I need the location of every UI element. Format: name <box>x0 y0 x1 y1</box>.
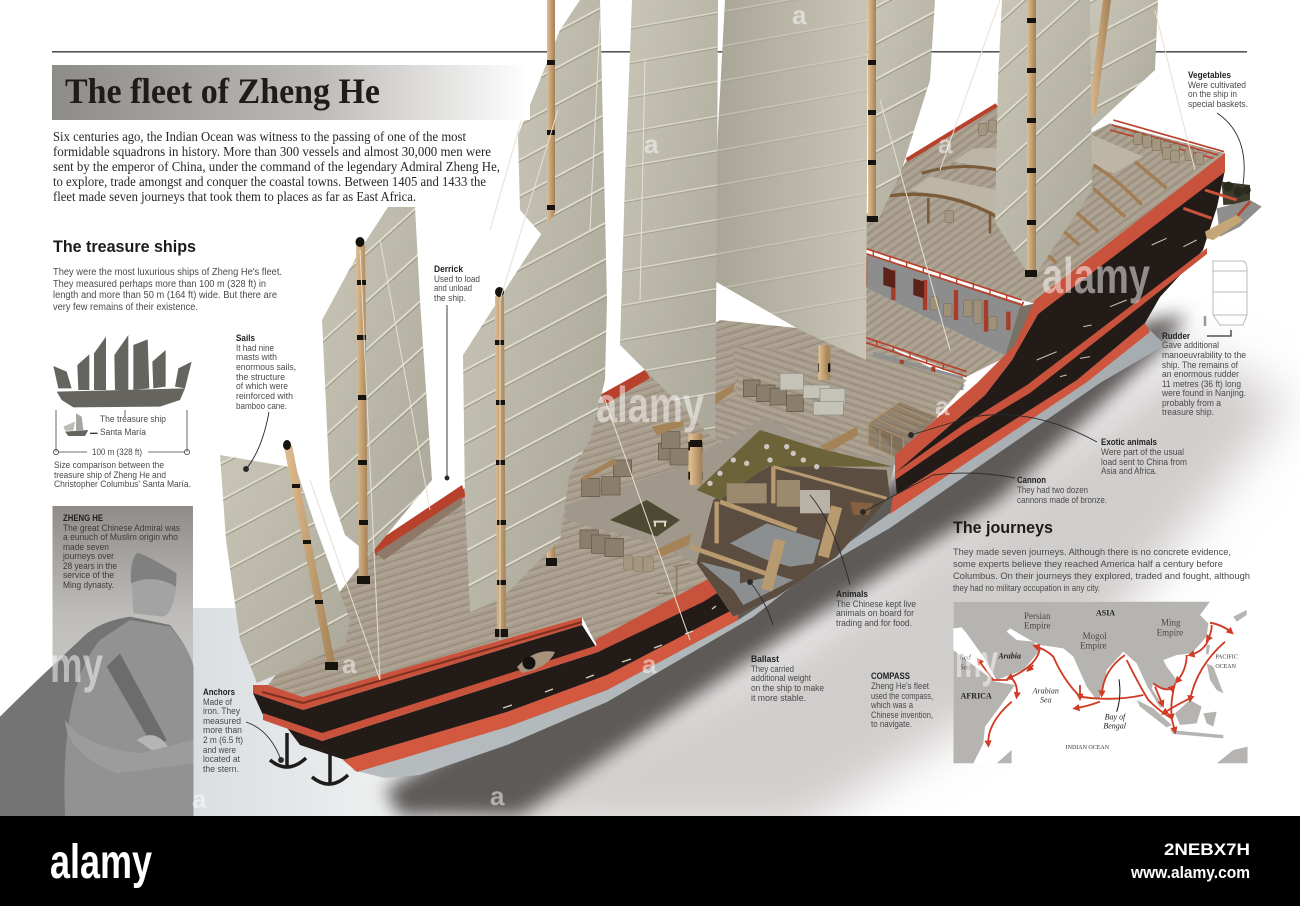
label: compass: to navigate. <box>871 719 912 729</box>
mid deck <box>863 287 1007 377</box>
label: derrick: Derrick <box>434 264 464 274</box>
top rule <box>52 51 1247 53</box>
stock watermarks: my <box>955 635 998 687</box>
label: compass: which was a <box>870 700 913 710</box>
rigging lines <box>310 0 1195 680</box>
land masses <box>953 602 1248 763</box>
bow details <box>1037 182 1262 377</box>
hold interior <box>697 463 890 617</box>
image id and site <box>1130 840 1250 882</box>
place names: ASIA <box>1096 609 1115 618</box>
panel text: ZHENG HE <box>63 513 103 523</box>
label: anchors: measured <box>203 716 241 726</box>
label: rudder: ship. The remains of <box>1162 360 1238 370</box>
size comparison diagram <box>53 335 192 489</box>
panel text: The great Chinese Admiral was <box>63 523 180 533</box>
label: sails: reinforced with <box>236 391 293 401</box>
treasure ships text <box>53 267 282 313</box>
rudder diagram <box>1205 261 1247 336</box>
sail five <box>620 0 718 485</box>
stock watermarks: a <box>490 781 505 811</box>
place names: Red <box>958 652 971 661</box>
anchors <box>270 733 348 785</box>
label: sails: the structure <box>236 372 285 382</box>
oar marks stern <box>503 606 716 708</box>
place names: Bay of <box>1105 712 1127 721</box>
bay pointer <box>1117 679 1120 712</box>
label: rudder: Rudder <box>1162 331 1190 341</box>
map of the voyages <box>953 602 1248 763</box>
stock watermarks <box>50 0 1150 814</box>
treasure ships text: length and more than 50 m (164 ft) wide. But there are <box>53 290 277 301</box>
label: sails: enormous sails, <box>236 362 296 372</box>
label: exotic animals: Asia and Africa. <box>1101 466 1157 476</box>
title band: The fleet of Zheng He <box>65 71 380 111</box>
far cargo platform <box>733 347 967 458</box>
panel text: a eunuch of Muslim origin who <box>63 532 178 542</box>
place names: Persian <box>1024 611 1051 621</box>
barrels on the deck <box>945 120 1204 223</box>
journeys text: they had no military occupation in any city. <box>953 583 1100 594</box>
label: anchors: Made of <box>203 697 232 707</box>
far stern railing <box>372 370 650 560</box>
label: rudder: probably from a <box>1162 398 1221 408</box>
label: sails: It had nine <box>236 343 274 353</box>
illustration: cutaway treasure ship <box>220 0 1262 785</box>
intro text: sent by the emperor of China, under the command of the legendary Admiral Zheng He, <box>53 160 500 175</box>
treasure ships text: They measured perhaps more than 100 m (328 ft) in <box>53 279 266 290</box>
label: anchors: located at <box>203 754 240 764</box>
intro text <box>53 130 500 205</box>
journeys text <box>953 547 1250 594</box>
sail seven <box>866 0 935 222</box>
label: animals <box>836 589 916 628</box>
hull: stern sheer strake <box>253 617 582 710</box>
label: cannon: They had two dozen <box>1017 485 1088 495</box>
intro text: fleet made seven journeys that took them to places as far as East Africa. <box>53 190 416 205</box>
place names: Sea <box>1040 696 1052 705</box>
heading: the journeys: The journeys <box>953 518 1053 537</box>
intro text: to explore, trade amongst and conquer the coastal towns. Between 1405 and 1433 the <box>53 175 486 190</box>
title band <box>52 65 530 120</box>
deck beams <box>1037 162 1167 263</box>
label: exotic animals <box>1101 437 1187 476</box>
intro text: Six centuries ago, the Indian Ocean was witness to the passing of one of the most <box>53 130 466 145</box>
hull: black lower band <box>285 580 738 760</box>
label: rudder: Gave additional <box>1162 340 1219 350</box>
panel text <box>62 513 180 590</box>
label: rudder: an enormous rudder <box>1162 369 1239 379</box>
sail six <box>713 0 868 375</box>
treasure ships text: very few remains of their existence. <box>53 302 198 313</box>
journeys text: They made seven journeys. Although there is no concrete evidence, <box>953 547 1231 558</box>
label: derrick: the ship. <box>434 293 466 303</box>
heading: the treasure ships: The treasure ships <box>53 237 196 256</box>
floor tint behind the stern <box>193 608 433 816</box>
label: anchors: iron. They <box>203 706 240 716</box>
diagram labels: Christopher Columbus' Santa María. <box>54 479 191 489</box>
label: animals: The Chinese kept live <box>836 599 916 609</box>
stock watermarks: a <box>192 784 207 814</box>
journeys text: some experts believe they reached America half a century before <box>953 559 1223 570</box>
place names: AFRICA <box>961 692 992 701</box>
label: ballast: They carried <box>751 664 794 674</box>
bow hull rail <box>895 153 1225 473</box>
panel: Zheng He <box>0 506 193 817</box>
intro text: formidable squadrons in history. More than 300 vessels and almost 30,000 men were <box>53 145 491 160</box>
footer logo: alamy <box>50 836 152 889</box>
panel text: Ming dynasty. <box>63 580 114 590</box>
label: anchors: the stern. <box>203 764 239 774</box>
stock watermarks: alamy <box>596 377 704 433</box>
label: exotic animals: Were part of the usual <box>1101 447 1184 457</box>
sail four <box>518 0 607 566</box>
label: ballast: Ballast <box>751 654 779 664</box>
small boat at the bow <box>1205 215 1243 240</box>
label: vegetables: Vegetables <box>1188 70 1231 80</box>
diagram labels: 100 m (328 ft) <box>92 447 142 457</box>
diagram labels: treasure ship of Zheng He and <box>54 470 166 480</box>
mast bases <box>688 433 702 480</box>
lower railing <box>863 337 967 377</box>
barrels <box>623 555 653 572</box>
label: cannon: cannons made of bronze. <box>1017 495 1107 505</box>
outriggers <box>1183 190 1237 218</box>
ballast stones <box>700 523 820 605</box>
cargo barrels <box>930 297 997 330</box>
Santa Maria silhouette <box>63 413 98 436</box>
place names: Empire <box>1080 641 1106 651</box>
fore deck structures <box>863 105 1225 390</box>
oculus eye <box>517 651 555 673</box>
timber cage <box>868 402 937 458</box>
place names: Sea <box>960 662 971 671</box>
diagram labels: The treasure ship <box>100 414 166 424</box>
image id and site: www.alamy.com <box>1130 863 1250 882</box>
stock watermarks: alamy <box>1042 248 1150 304</box>
statue of Zheng He <box>0 553 193 817</box>
label: rudder: 11 metres (36 ft) long <box>1162 379 1241 389</box>
diagram labels <box>54 414 191 489</box>
label: vegetables: Were cultivated <box>1188 80 1246 90</box>
label: compass: used the compass, <box>871 691 933 701</box>
hull: red middle stripe <box>263 572 738 741</box>
hull: black upper band <box>253 625 598 737</box>
label: animals: trading and for food. <box>836 618 912 628</box>
bow hull middle stripe <box>895 248 1207 480</box>
horses in pen <box>610 500 680 537</box>
treasure ship silhouette <box>53 335 192 407</box>
label: sails: Sails <box>236 333 255 343</box>
far sail nine <box>1088 0 1158 130</box>
place names: Empire <box>1024 620 1050 630</box>
panel text: 28 years in the <box>63 561 117 571</box>
label: anchors: and were <box>203 745 236 755</box>
lower bulkhead <box>873 352 963 390</box>
place names: Bengal <box>1103 722 1127 731</box>
place names: Arabian <box>1032 686 1059 695</box>
label: anchors: more than <box>203 725 242 735</box>
stock watermarks: a <box>938 129 953 159</box>
label: rudder <box>1161 331 1246 417</box>
place names: INDIAN OCEAN <box>1066 745 1110 751</box>
vegetable baskets <box>1217 182 1262 237</box>
label: compass <box>870 671 933 729</box>
stock watermarks: a <box>642 649 657 679</box>
panel text: made seven <box>63 542 109 552</box>
footer bar <box>0 816 1300 906</box>
hull: keel grey band <box>352 330 1165 778</box>
platforms <box>565 417 895 617</box>
label: ballast: additional weight <box>751 673 811 683</box>
measure bar <box>53 410 190 455</box>
label: compass: COMPASS <box>871 671 910 681</box>
timber frames <box>690 467 887 590</box>
bulkhead below deck <box>863 253 1022 357</box>
place names <box>958 609 1238 751</box>
hold cargo <box>727 480 800 507</box>
place names: Ming <box>1161 618 1181 628</box>
stock watermarks: a <box>342 649 357 679</box>
place names: PACIFIC <box>1215 655 1238 661</box>
place names: OCEAN <box>1215 664 1237 670</box>
stock watermarks: a <box>792 0 807 30</box>
stacked crates <box>580 380 803 557</box>
label: exotic animals: load sent to China from <box>1101 457 1187 467</box>
label: derrick: and unload <box>434 283 472 293</box>
stern to midship deck <box>268 320 965 697</box>
sail two <box>322 207 432 584</box>
label: rudder: treasure ship. <box>1162 407 1214 417</box>
upper railing <box>865 248 1023 357</box>
journeys text: Columbus. On their journeys they explored, traded and fought, although <box>953 571 1250 582</box>
stock watermarks: a <box>935 391 950 421</box>
image id and site: 2NEBX7H <box>1164 840 1250 859</box>
place names: Mogol <box>1083 631 1107 641</box>
label: exotic animals: Exotic animals <box>1101 437 1157 447</box>
label: derrick <box>434 264 480 303</box>
label: vegetables: on the ship in <box>1188 89 1237 99</box>
canopies <box>883 133 1143 233</box>
label: anchors <box>203 687 243 774</box>
label: vegetables <box>1188 70 1248 109</box>
stern sail one <box>220 440 350 683</box>
label: anchors: Anchors <box>203 687 235 697</box>
stock watermarks: a <box>644 129 659 159</box>
far red rails <box>907 105 997 160</box>
ship shadow on the ground <box>385 315 1290 830</box>
bow hull black planking <box>895 170 1225 497</box>
label: sails: bamboo cane. <box>236 401 287 411</box>
treasure ships text: They were the most luxurious ships of Zheng He's fleet. <box>53 267 282 278</box>
label: ballast: on the ship to make <box>751 683 824 693</box>
label: anchors: 2 m (6.5 ft) <box>203 735 243 745</box>
label: ballast: it more stable. <box>751 693 806 703</box>
upper platform <box>712 395 837 447</box>
diagram labels: Santa María <box>100 427 146 437</box>
label: derrick: Used to load <box>434 274 480 284</box>
label: sails: of which were <box>236 381 288 391</box>
panel text: service of the <box>63 570 114 580</box>
sail eight <box>995 0 1092 280</box>
stock watermarks: my <box>50 637 103 693</box>
label: animals: animals on board for <box>836 608 914 618</box>
label: animals: Animals <box>836 589 868 599</box>
cannon <box>850 502 873 515</box>
stairway <box>1005 303 1035 357</box>
label: cannon: Cannon <box>1017 475 1046 485</box>
derrick crane <box>657 563 690 597</box>
label: compass: Chinese invention, <box>871 710 933 720</box>
label: rudder: were found in Nanjing. <box>1161 388 1246 398</box>
diagram labels: Size comparison between the <box>54 460 164 470</box>
bow oar marks <box>1037 238 1197 377</box>
hull: red lower strake <box>343 607 738 772</box>
place names: Arabia <box>997 652 1021 661</box>
cutaway hold <box>565 347 967 617</box>
label: sails <box>236 333 296 411</box>
place names: Empire <box>1157 628 1183 638</box>
bow hull lower red strake <box>890 323 1150 514</box>
panel text: journeys over <box>62 551 114 561</box>
label: vegetables: special baskets. <box>1188 99 1248 109</box>
label: rudder: manoeuvrability to the <box>1162 350 1246 360</box>
label: ballast <box>751 654 824 703</box>
hull: forward rail <box>595 563 738 650</box>
label: sails: masts with <box>236 352 277 362</box>
fore deck <box>863 105 1225 303</box>
leader lines <box>244 113 1244 762</box>
pale sacks <box>780 373 845 415</box>
voyage routes <box>978 623 1232 745</box>
green animal deck <box>697 430 893 500</box>
label: compass: Zheng He's fleet <box>871 681 929 691</box>
sail three <box>463 205 570 637</box>
door posts <box>865 257 1008 332</box>
label: cannon <box>1017 475 1107 505</box>
small boats <box>580 383 858 557</box>
